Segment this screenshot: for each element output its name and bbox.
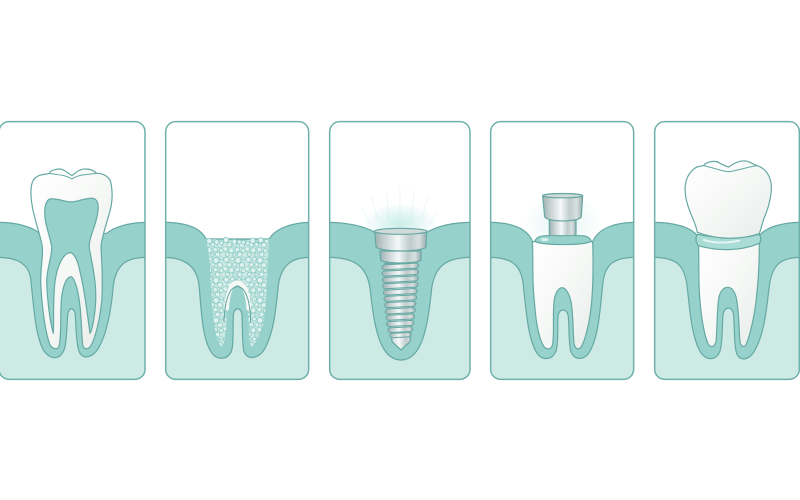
gum collar ring	[696, 234, 761, 250]
pulp chamber	[45, 198, 98, 333]
panel frame	[0, 122, 145, 379]
panel: natural tooth	[0, 122, 147, 381]
implant screw	[374, 228, 427, 350]
panel frame	[330, 122, 470, 379]
panel frame	[166, 122, 309, 379]
panel: bone graft	[163, 122, 311, 381]
tooth root	[698, 242, 759, 347]
occlusal line	[49, 173, 97, 179]
glow rays	[362, 188, 437, 223]
panel: implant post	[327, 122, 472, 381]
panel frame	[655, 122, 799, 379]
crown occlusal line	[703, 166, 757, 172]
panel: final crown	[653, 122, 800, 381]
tooth with crown and roots	[31, 169, 112, 349]
crown	[685, 161, 771, 238]
healing cap	[535, 236, 591, 245]
panel frame	[491, 122, 634, 379]
panel: abutment	[489, 122, 635, 381]
prepared tooth base	[532, 242, 593, 349]
remaining root arch	[224, 283, 251, 322]
abutment post	[543, 193, 583, 238]
bone graft granules	[206, 237, 269, 347]
